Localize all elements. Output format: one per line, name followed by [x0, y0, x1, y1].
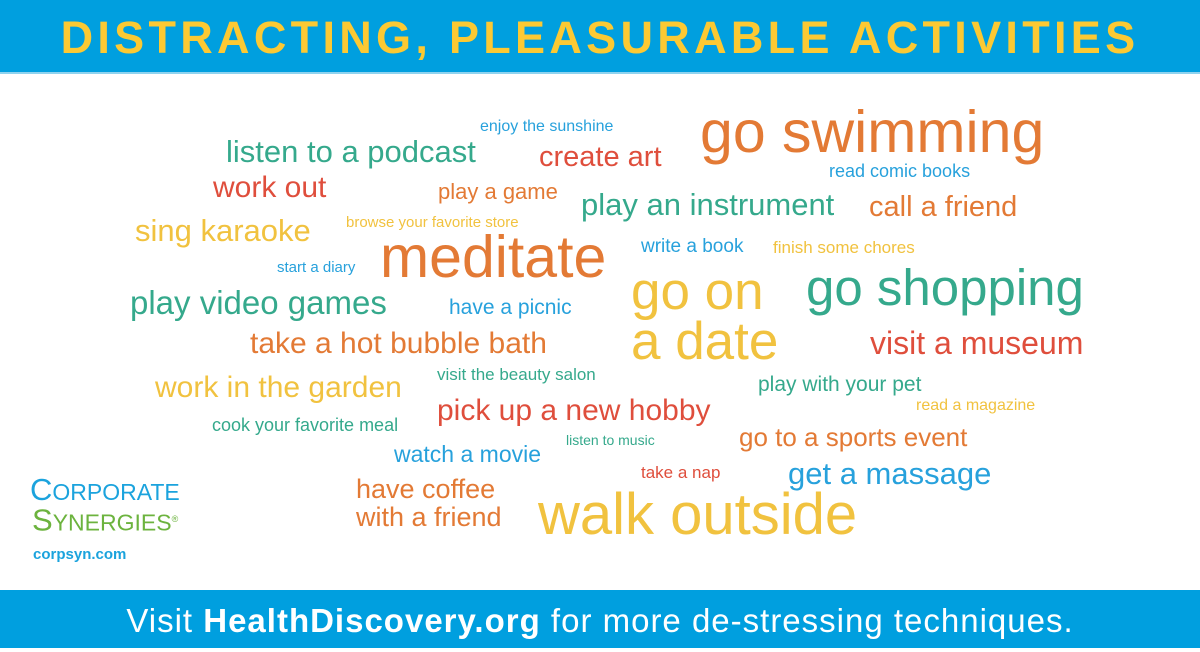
word: create art: create art: [539, 141, 662, 173]
word: read a magazine: read a magazine: [916, 397, 1035, 414]
word: start a diary: start a diary: [277, 259, 355, 276]
word: cook your favorite meal: cook your favorite meal: [212, 415, 398, 435]
word: read comic books: read comic books: [829, 161, 970, 181]
word: finish some chores: finish some chores: [773, 238, 915, 257]
word: have coffee with a friend: have coffee: [356, 474, 495, 504]
footer: Visit HealthDiscovery.org for more de-stressing techniques.: [126, 602, 1074, 639]
word: pick up a new hobby: pick up a new hobby: [437, 394, 711, 427]
word: listen to a podcast: listen to a podcast: [226, 134, 476, 169]
word: go swimming: go swimming: [700, 99, 1044, 165]
header: [0, 0, 1200, 74]
word: have coffee with a friend: [356, 474, 502, 532]
word: have coffee with a friend: with a friend: [356, 502, 502, 532]
word: go to a sports event: go to a sports event: [739, 422, 967, 452]
word: play a game: play a game: [438, 179, 558, 204]
word: go on a date: a date: [631, 312, 778, 371]
word: browse your favorite store: browse your favorite store: [346, 214, 519, 231]
word: walk outside: walk outside: [538, 482, 857, 547]
word: play video games: play video games: [130, 284, 387, 321]
word: call a friend: call a friend: [869, 191, 1017, 223]
word: visit a museum: visit a museum: [870, 325, 1083, 361]
footer: [0, 590, 1200, 648]
word: visit the beauty salon: visit the beauty salon: [437, 365, 596, 384]
word: work out: work out: [213, 171, 326, 204]
word: take a hot bubble bath: take a hot bubble bath: [250, 327, 547, 360]
logo: Corporate Synergies: SYNERGIES®: [32, 503, 178, 538]
header: DISTRACTING, PLEASURABLE ACTIVITIES: [61, 12, 1139, 63]
word: play with your pet: play with your pet: [758, 373, 921, 396]
word: have a picnic: have a picnic: [449, 296, 572, 319]
word: watch a movie: watch a movie: [394, 441, 541, 467]
word: write a book: write a book: [641, 236, 743, 257]
logo: Corporate Synergies: corpsyn.com: [33, 546, 126, 563]
word: meditate: meditate: [380, 224, 606, 290]
logo: Corporate Synergies: [30, 472, 180, 563]
word: enjoy the sunshine: enjoy the sunshine: [480, 118, 613, 135]
word: sing karaoke: sing karaoke: [135, 213, 311, 248]
word: go on a date: [631, 262, 778, 371]
word: get a massage: get a massage: [788, 456, 991, 491]
word: go on a date: go on: [631, 262, 764, 321]
word: work in the garden: work in the garden: [155, 371, 402, 404]
word: play an instrument: play an instrument: [581, 187, 834, 222]
word: take a nap: take a nap: [641, 463, 720, 482]
logo: Corporate Synergies: CORPORATE: [30, 472, 180, 507]
word: listen to music: listen to music: [566, 432, 655, 448]
word: go shopping: go shopping: [806, 259, 1084, 316]
